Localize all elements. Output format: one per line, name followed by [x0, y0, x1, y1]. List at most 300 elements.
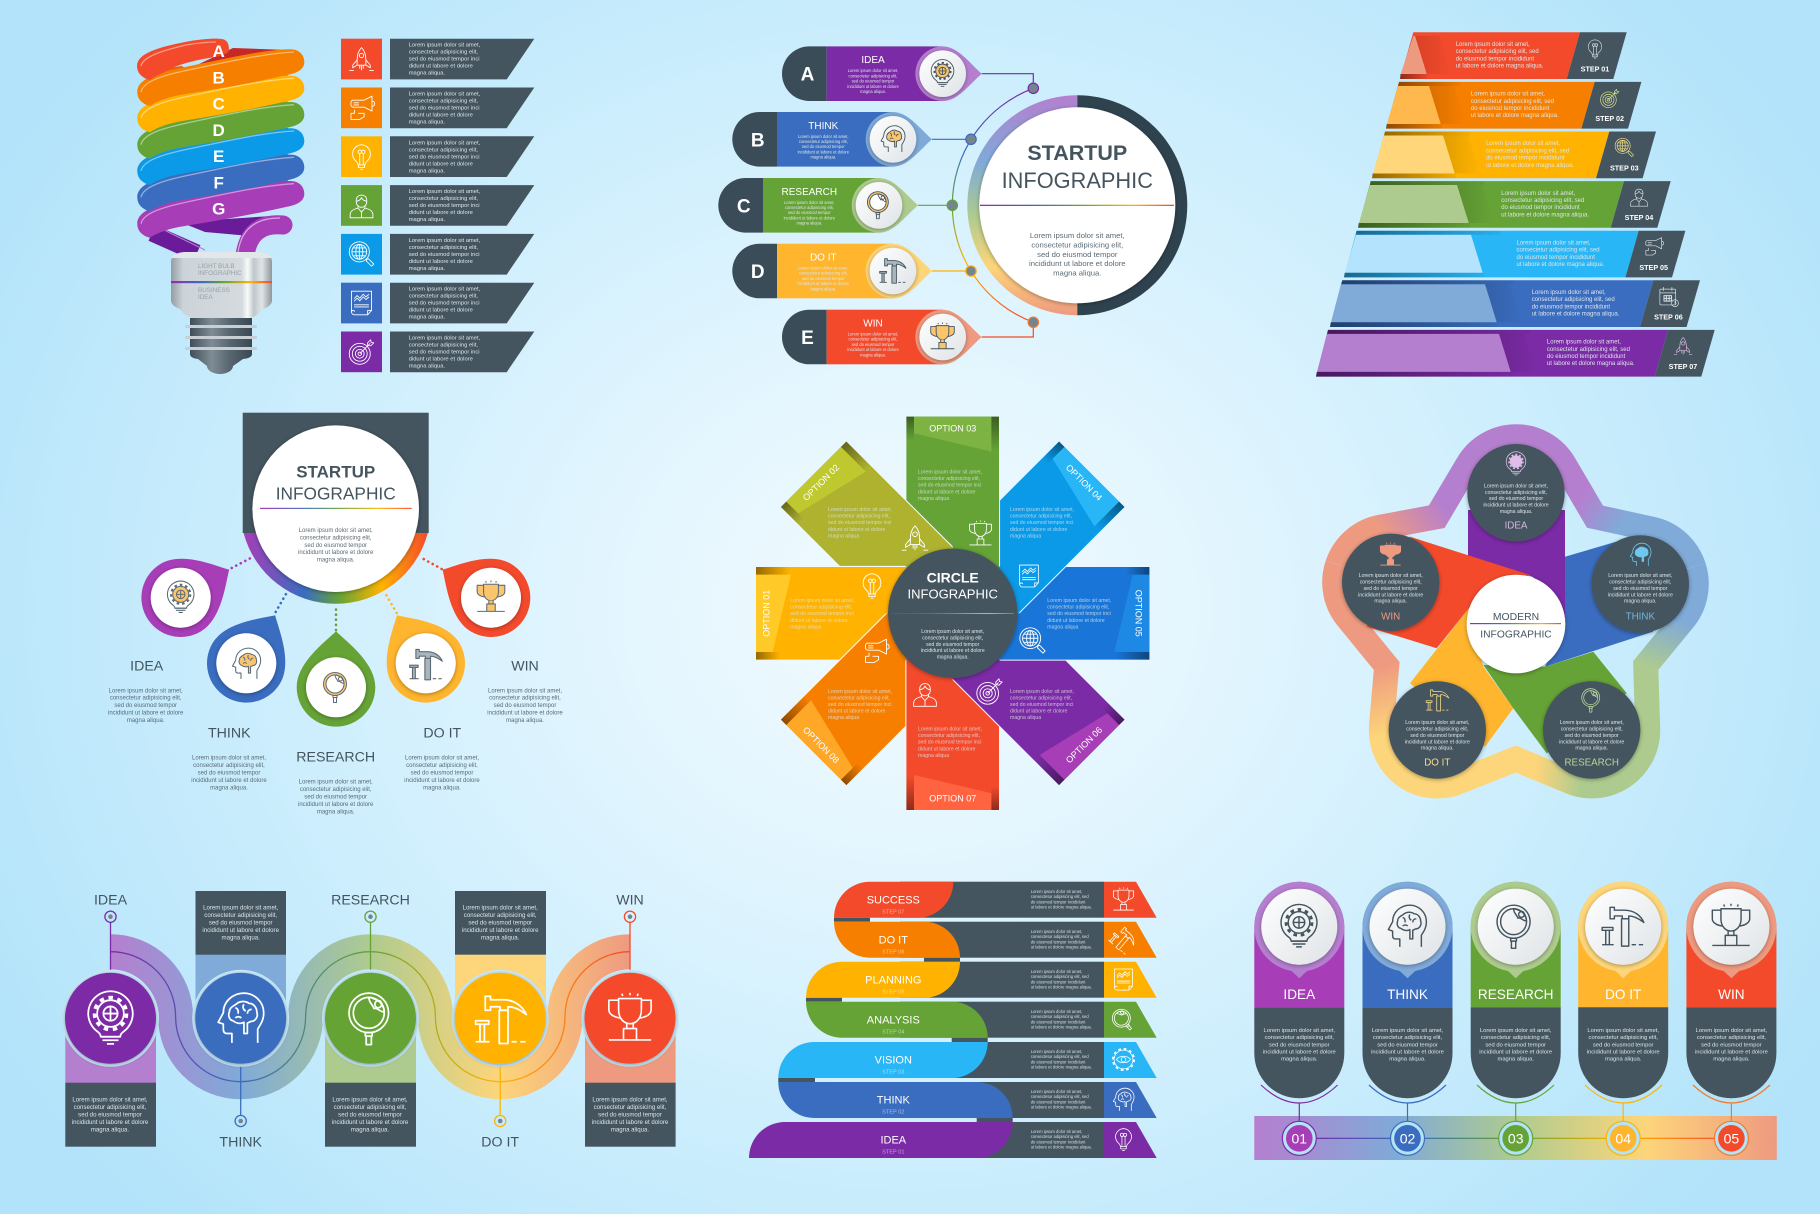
- step 01: ut labore et dolore magna aliqua.: [1456, 64, 1544, 70]
- circle IDEA: [62, 970, 159, 1067]
- ribbon think: ut labore et dolore magna aliqua.: [1031, 1105, 1092, 1110]
- step 02: do eiusmod tempor incididunt: [1471, 106, 1550, 112]
- label DO IT: sed do eiusmod tempor: [411, 770, 473, 776]
- star outline: [1335, 437, 1696, 786]
- box THINK text: [196, 891, 286, 955]
- panel: numbered columns: [1254, 882, 1777, 1160]
- header block and ring: magna aliqua.: [317, 558, 355, 564]
- petal texts: didunt ut labore et dolore: [828, 709, 886, 715]
- list row 4: didunt ut labore et dolore: [409, 210, 473, 216]
- step 03: consectetur adipisicing elit, sed: [1486, 148, 1569, 154]
- box IDEA text: magna aliqua.: [91, 1127, 129, 1134]
- petal texts: consectetur adipisicing elit,: [828, 514, 890, 520]
- pill D DO IT: Lorem ipsum dolor sit amet,: [798, 266, 849, 270]
- pill C RESEARCH: sed do eiusmod tempor: [788, 210, 831, 215]
- central circle: magna aliqua.: [1053, 269, 1101, 278]
- list row 5: Lorem ipsum dolor sit amet,: [409, 238, 481, 244]
- step 05: consectetur adipisicing elit, sed: [1516, 248, 1600, 254]
- petal option 01: [756, 567, 953, 660]
- list row 2: [341, 88, 534, 128]
- connector arc and lines: [918, 74, 1033, 337]
- step 03: [1372, 132, 1656, 178]
- header block and ring: sed do eiusmod tempor: [304, 543, 367, 549]
- box THINK text: incididunt ut labore et dolore: [202, 927, 280, 934]
- node THINK: THINK: [1626, 611, 1655, 622]
- node WIN: [1342, 534, 1439, 631]
- step 06: ut labore et dolore magna aliqua.: [1532, 312, 1620, 318]
- column IDEA: [1254, 882, 1344, 1155]
- step 02: Lorem ipsum dolor sit amet,: [1471, 92, 1545, 98]
- node RESEARCH: RESEARCH: [1564, 758, 1619, 769]
- node DO IT: magna aliqua.: [1421, 746, 1454, 752]
- box WIN text: Lorem ipsum dolor sit amet,: [592, 1096, 668, 1103]
- step 04: STEP 04: [1625, 213, 1653, 222]
- step 01: [1400, 32, 1627, 79]
- light bulb spiral: [137, 39, 304, 255]
- node WIN: sed do eiusmod tempor: [1364, 586, 1418, 592]
- step 05: STEP 05: [1639, 263, 1668, 272]
- column RESEARCH: 03: [1508, 1130, 1524, 1146]
- central circle: incididunt ut labore et dolore: [1029, 259, 1126, 268]
- step 02: STEP 02: [1595, 114, 1624, 123]
- label RESEARCH: [296, 750, 375, 815]
- box WIN text: magna aliqua.: [611, 1127, 649, 1134]
- circle RESEARCH: [322, 970, 419, 1067]
- list row 5: consectetur adipisicing elit,: [409, 245, 478, 251]
- list row 7: [341, 332, 534, 372]
- column THINK: [1362, 882, 1452, 1155]
- ribbon think: THINK: [877, 1094, 910, 1106]
- column THINK: Lorem ipsum dolor sit amet,: [1372, 1028, 1444, 1034]
- petal texts: Lorem ipsum dolor sit amet,: [790, 598, 854, 604]
- ribbon do it: DO IT: [879, 934, 908, 946]
- label THINK: [191, 726, 267, 791]
- box RESEARCH text: [325, 1083, 416, 1147]
- pill B THINK: incididunt ut labore et dolore: [798, 149, 850, 154]
- light bulb spiral: E: [213, 147, 224, 166]
- list row 4: consectetur adipisicing elit,: [409, 196, 478, 202]
- drop IDEA: [127, 536, 249, 651]
- column THINK: magna aliqua.: [1389, 1057, 1426, 1063]
- label THINK: Lorem ipsum dolor sit amet,: [192, 756, 266, 762]
- step 03: do eiusmod tempor incididunt: [1486, 156, 1565, 162]
- step 05: [1344, 231, 1685, 277]
- pill B THINK: B: [751, 130, 765, 151]
- central circle: consectetur adipisicing elit,: [1031, 240, 1123, 249]
- step 03: ut labore et dolore magna aliqua.: [1486, 163, 1574, 169]
- pill E WIN: Lorem ipsum dolor sit amet,: [848, 332, 898, 336]
- ribbon idea: Lorem ipsum dolor sit amet,: [1031, 1129, 1082, 1134]
- wave labels: DO IT: [481, 1135, 519, 1151]
- list row 4: Lorem ipsum dolor sit amet,: [409, 189, 481, 195]
- header block and ring: consectetur adipisicing elit,: [300, 535, 372, 541]
- petal option 05: [953, 567, 1149, 660]
- step 02: consectetur adipisicing elit, sed: [1471, 99, 1554, 105]
- label IDEA: [108, 659, 184, 724]
- light bulb spiral: A: [213, 42, 225, 61]
- list row 1: consectetur adipisicing elit,: [409, 50, 478, 56]
- column THINK: 02: [1400, 1130, 1415, 1146]
- label RESEARCH: incididunt ut labore et dolore: [298, 802, 374, 808]
- petal texts: sed do eiusmod tempor inci: [918, 483, 981, 489]
- list row 1: sed do eiusmod tempor inci: [409, 57, 480, 63]
- step 02: ut labore et dolore magna aliqua.: [1471, 113, 1559, 119]
- option labels: OPTION 05: [1133, 590, 1143, 637]
- step 03: STEP 03: [1610, 164, 1639, 173]
- box THINK text: Lorem ipsum dolor sit amet,: [203, 904, 279, 911]
- ribbon vision: do eiusmod tempor incididunt: [1031, 1059, 1086, 1064]
- list row 7: didunt ut labore et dolore: [409, 356, 473, 362]
- node THINK: magna aliqua.: [1624, 599, 1657, 605]
- pill C RESEARCH: incididunt ut labore et dolore: [784, 215, 836, 220]
- petal option 06: [920, 581, 1125, 785]
- ribbon analysis: [806, 1002, 1157, 1038]
- label IDEA: magna aliqua.: [127, 718, 165, 724]
- petal texts: didunt ut labore et dolore: [790, 618, 848, 624]
- ribbon planning: [806, 962, 1157, 998]
- petal texts: Lorem ipsum dolor sit amet,: [1010, 689, 1074, 695]
- label WIN: WIN: [511, 659, 539, 675]
- option labels: OPTION 01: [762, 590, 772, 637]
- petal texts: magna aliqua: [828, 715, 859, 721]
- drop WIN: [423, 536, 545, 651]
- label RESEARCH: RESEARCH: [296, 750, 375, 766]
- box RESEARCH text: magna aliqua.: [351, 1127, 389, 1134]
- list row 4: magna aliqua.: [409, 217, 446, 223]
- petal texts: sed do eiusmod tempor inci: [1047, 611, 1111, 617]
- pill B THINK: [732, 112, 932, 167]
- petal texts: sed do eiusmod tempor inci: [828, 520, 891, 526]
- petal texts: didunt ut labore et dolore: [1010, 527, 1068, 533]
- center circle: INFOGRAPHIC: [908, 586, 998, 601]
- node RESEARCH: Lorem ipsum dolor sit amet,: [1560, 720, 1624, 726]
- label RESEARCH: sed do eiusmod tempor: [304, 794, 367, 800]
- column RESEARCH: consectetur adipisicing elit,: [1481, 1035, 1551, 1041]
- circle DO IT: [452, 970, 549, 1067]
- step 07: do eiusmod tempor incididunt: [1547, 354, 1626, 360]
- label THINK: magna aliqua.: [210, 785, 248, 791]
- step 07: Lorem ipsum dolor sit amet,: [1547, 340, 1621, 346]
- column WIN: Lorem ipsum dolor sit amet,: [1696, 1028, 1768, 1034]
- petal texts: consectetur adipisicing elit,: [918, 733, 980, 739]
- ribbon idea: ut labore et dolore magna aliqua.: [1031, 1145, 1092, 1150]
- ribbon analysis: Lorem ipsum dolor sit amet,: [1031, 1009, 1082, 1014]
- node THINK: sed do eiusmod tempor: [1613, 586, 1668, 592]
- light bulb spiral: D: [213, 121, 225, 140]
- column THINK: consectetur adipisicing elit,: [1373, 1035, 1443, 1041]
- petal texts: consectetur adipisicing elit,: [1047, 605, 1109, 611]
- column WIN: consectetur adipisicing elit,: [1697, 1035, 1766, 1041]
- node WIN: magna aliqua.: [1374, 599, 1407, 605]
- list row 1: magna aliqua.: [409, 71, 446, 77]
- column WIN: sed do eiusmod tempor: [1701, 1042, 1762, 1048]
- step 04: consectetur adipisicing elit, sed: [1501, 198, 1584, 204]
- step 07: ut labore et dolore magna aliqua.: [1547, 361, 1635, 367]
- column DO IT: consectetur adipisicing elit,: [1589, 1035, 1658, 1041]
- ribbon think: [778, 1082, 1157, 1118]
- node IDEA: IDEA: [1505, 520, 1528, 531]
- pill E WIN: incididunt ut labore et dolore: [847, 347, 899, 352]
- list row 1: [341, 39, 534, 79]
- node IDEA: sed do eiusmod tempor: [1489, 496, 1543, 502]
- step 04: do eiusmod tempor incididunt: [1501, 205, 1580, 211]
- pill A IDEA: [782, 46, 982, 101]
- ribbon think: Lorem ipsum dolor sit amet,: [1031, 1089, 1082, 1094]
- petal option 04: [920, 441, 1125, 646]
- list row 1: Lorem ipsum dolor sit amet,: [409, 43, 481, 49]
- petal texts: consectetur adipisicing elit,: [828, 695, 890, 701]
- central circle: Lorem ipsum dolor sit amet,: [1030, 231, 1125, 240]
- column DO IT: magna aliqua.: [1605, 1057, 1642, 1063]
- center circle: INFOGRAPHIC: [1480, 629, 1552, 640]
- panel: light bulb infographic: [137, 39, 534, 374]
- petal icons: [863, 520, 1045, 706]
- ribbon planning: PLANNING: [865, 974, 921, 986]
- step 04: ut labore et dolore magna aliqua.: [1501, 212, 1589, 218]
- circle WIN: [582, 970, 678, 1067]
- ribbon success: Lorem ipsum dolor sit amet,: [1031, 889, 1082, 894]
- central circle: STARTUP: [1027, 141, 1127, 165]
- pill E WIN: [782, 310, 982, 364]
- pill A IDEA: Lorem ipsum dolor sit amet,: [848, 68, 898, 73]
- step 04: [1358, 181, 1671, 228]
- pill C RESEARCH: RESEARCH: [782, 187, 837, 198]
- box WIN text: [585, 1083, 676, 1147]
- box IDEA text: Lorem ipsum dolor sit amet,: [72, 1096, 148, 1103]
- dotted connectors: [232, 558, 442, 630]
- petal option 03: [906, 417, 999, 613]
- column DO IT: incididunt ut labore et dolore: [1587, 1049, 1660, 1055]
- petal texts: Lorem ipsum dolor sit amet,: [828, 507, 892, 513]
- node IDEA: Lorem ipsum dolor sit amet,: [1484, 484, 1548, 490]
- pill C RESEARCH: magna aliqua.: [796, 221, 822, 226]
- column RESEARCH: [1471, 882, 1561, 1155]
- ribbon do it: STEP 06: [882, 950, 904, 956]
- ribbon do it: [834, 922, 1157, 958]
- pill C RESEARCH: Lorem ipsum dolor sit amet,: [784, 200, 835, 205]
- petal texts: didunt ut labore et dolore: [1010, 709, 1068, 715]
- option labels: OPTION 08: [801, 725, 841, 765]
- pill E WIN: consectetur adipisicing elit,: [849, 337, 897, 342]
- header block and ring: [243, 413, 429, 604]
- ribbon vision: STEP 03: [882, 1070, 904, 1076]
- step 01: STEP 01: [1581, 64, 1609, 74]
- header block and ring: incididunt ut labore et dolore: [298, 550, 374, 556]
- circle THINK: [192, 970, 289, 1067]
- column IDEA: magna aliqua.: [1281, 1057, 1318, 1063]
- list row 3: consectetur adipisicing elit,: [409, 147, 478, 153]
- ribbon planning: Lorem ipsum dolor sit amet,: [1031, 969, 1082, 974]
- petal texts: magna aliqua: [790, 624, 822, 630]
- pill D DO IT: sed do eiusmod tempor: [802, 276, 845, 281]
- center circle: CIRCLE: [927, 569, 979, 585]
- petal option 07: [906, 613, 999, 810]
- box THINK text: sed do eiusmod tempor: [209, 920, 273, 926]
- center circle: incididunt ut labore et dolore: [921, 648, 985, 654]
- box DO IT text: magna aliqua.: [481, 935, 520, 942]
- pill E WIN: magna aliqua.: [860, 352, 886, 357]
- ribbon success: consectetur adipisicing elit, sed: [1031, 894, 1089, 899]
- node RESEARCH: [1543, 681, 1640, 779]
- column RESEARCH: Lorem ipsum dolor sit amet,: [1480, 1028, 1552, 1034]
- petal texts: consectetur adipisicing elit,: [1010, 514, 1072, 520]
- panel: step pyramid: [1316, 32, 1715, 377]
- node THINK: incididunt ut labore et dolore: [1608, 592, 1673, 598]
- ribbon analysis: consectetur adipisicing elit, sed: [1031, 1014, 1089, 1019]
- column DO IT: DO IT: [1605, 987, 1641, 1002]
- label DO IT: incididunt ut labore et dolore: [404, 778, 480, 784]
- ribbon do it: consectetur adipisicing elit, sed: [1031, 934, 1089, 939]
- ribbon success: [834, 882, 1157, 918]
- column DO IT: Lorem ipsum dolor sit amet,: [1587, 1028, 1659, 1034]
- list row 6: Lorem ipsum dolor sit amet,: [409, 287, 481, 293]
- list row 5: magna aliqua.: [409, 266, 446, 272]
- label RESEARCH: magna aliqua.: [317, 809, 355, 815]
- petal texts: sed do eiusmod tempor inci: [918, 740, 981, 746]
- column THINK: sed do eiusmod tempor: [1377, 1042, 1438, 1048]
- node DO IT: incididunt ut labore et dolore: [1405, 739, 1470, 745]
- petal texts: magna aliqua: [1047, 624, 1079, 630]
- box IDEA text: consectetur adipisicing elit,: [74, 1104, 147, 1111]
- petal texts: magna aliqua: [918, 496, 949, 502]
- petal texts: sed do eiusmod tempor inci: [790, 611, 854, 617]
- node DO IT: consectetur adipisicing elit,: [1406, 727, 1468, 733]
- list row 7: sed do eiusmod tempor inci: [409, 350, 480, 356]
- node DO IT: sed do eiusmod tempor: [1410, 733, 1465, 739]
- panel: modern star infographic: [1335, 437, 1696, 786]
- ribbon do it: Lorem ipsum dolor sit amet,: [1031, 929, 1082, 934]
- node WIN: Lorem ipsum dolor sit amet,: [1359, 573, 1423, 579]
- petal texts: magna aliqua: [1010, 533, 1041, 539]
- node THINK: Lorem ipsum dolor sit amet,: [1608, 573, 1672, 579]
- label DO IT: magna aliqua.: [423, 785, 461, 791]
- list row 7: magna aliqua.: [409, 364, 446, 370]
- panel: wave timeline: [62, 891, 678, 1151]
- connector lines and nodes: [105, 911, 636, 1127]
- step 07: consectetur adipisicing elit, sed: [1547, 347, 1630, 353]
- pill B THINK: consectetur adipisicing elit,: [799, 139, 848, 144]
- central circle: INFOGRAPHIC: [1002, 168, 1153, 193]
- dark bars: [778, 882, 1104, 1158]
- ribbon vision: [778, 1042, 1157, 1078]
- pill D DO IT: consectetur adipisicing elit,: [799, 271, 848, 276]
- list row 6: consectetur adipisicing elit,: [409, 294, 478, 300]
- pill E WIN: WIN: [863, 318, 883, 330]
- pill A IDEA: consectetur adipisicing elit,: [849, 73, 897, 78]
- center circle: Lorem ipsum dolor sit amet,: [921, 629, 984, 635]
- center circle: sed do eiusmod tempor: [926, 642, 980, 648]
- column WIN: [1686, 882, 1776, 1155]
- list row 5: [341, 234, 534, 275]
- label IDEA: sed do eiusmod tempor: [114, 703, 177, 709]
- node IDEA: [1467, 444, 1565, 541]
- panel: circle infographic: [756, 417, 1149, 810]
- column DO IT: sed do eiusmod tempor: [1593, 1042, 1654, 1048]
- label IDEA: IDEA: [130, 659, 164, 675]
- panel: startup infographic with pills: [718, 46, 1187, 364]
- light bulb base: IDEA: [198, 294, 213, 301]
- step 05: ut labore et dolore magna aliqua.: [1516, 262, 1605, 268]
- column IDEA: 01: [1292, 1130, 1307, 1146]
- list row 3: magna aliqua.: [409, 168, 446, 174]
- light bulb base: BUSINESS: [198, 287, 230, 294]
- pill D DO IT: magna aliqua.: [810, 286, 836, 291]
- ribbon analysis: ut labore et dolore magna aliqua.: [1031, 1025, 1092, 1030]
- ribbon think: do eiusmod tempor incididunt: [1031, 1099, 1086, 1104]
- step 04: Lorem ipsum dolor sit amet,: [1501, 191, 1576, 197]
- step 05: do eiusmod tempor incididunt: [1516, 255, 1595, 261]
- ribbon do it: ut labore et dolore magna aliqua.: [1031, 945, 1092, 950]
- column WIN: WIN: [1718, 987, 1745, 1002]
- column WIN: 05: [1724, 1130, 1739, 1146]
- ribbon planning: STEP 05: [882, 990, 904, 996]
- panel: startup drops: [108, 413, 563, 815]
- center circle: [888, 549, 1017, 678]
- list row 6: magna aliqua.: [409, 315, 446, 321]
- star arms: [1367, 510, 1653, 753]
- list row 3: Lorem ipsum dolor sit amet,: [409, 140, 481, 146]
- ribbon success: SUCCESS: [867, 894, 920, 906]
- petal texts: Lorem ipsum dolor sit amet,: [1047, 598, 1111, 604]
- list row 2: sed do eiusmod tempor inci: [409, 106, 480, 112]
- box THINK text: magna aliqua.: [222, 935, 260, 942]
- option labels: [762, 423, 1143, 804]
- box IDEA text: sed do eiusmod tempor: [78, 1112, 142, 1118]
- wave labels: WIN: [616, 892, 644, 908]
- pill A IDEA: incididunt ut labore et dolore: [847, 84, 899, 89]
- central circle: sed do eiusmod tempor: [1037, 250, 1118, 259]
- ribbon success: ut labore et dolore magna aliqua.: [1031, 905, 1092, 910]
- label RESEARCH: Lorem ipsum dolor sit amet,: [299, 780, 373, 786]
- column THINK: incididunt ut labore et dolore: [1371, 1049, 1444, 1055]
- pill D DO IT: incididunt ut labore et dolore: [798, 281, 850, 286]
- petal texts: sed do eiusmod tempor inci: [828, 702, 891, 708]
- label DO IT: Lorem ipsum dolor sit amet,: [405, 756, 479, 762]
- step 02: [1386, 82, 1641, 129]
- pill B THINK: THINK: [808, 121, 839, 132]
- option labels: OPTION 02: [801, 462, 841, 503]
- petal texts: Lorem ipsum dolor sit amet,: [828, 689, 892, 695]
- box RESEARCH text: consectetur adipisicing elit,: [334, 1104, 407, 1111]
- wave labels: THINK: [219, 1135, 263, 1151]
- ribbon planning: ut labore et dolore magna aliqua.: [1031, 985, 1092, 990]
- column IDEA: IDEA: [1283, 987, 1316, 1002]
- label THINK: incididunt ut labore et dolore: [191, 778, 267, 784]
- petal texts: didunt ut labore et dolore: [918, 489, 976, 495]
- header block and ring: INFOGRAPHIC: [276, 483, 396, 503]
- label IDEA: incididunt ut labore et dolore: [108, 710, 184, 716]
- center circle: [1467, 575, 1565, 673]
- pill D DO IT: D: [751, 262, 765, 283]
- step 07: STEP 07: [1669, 362, 1697, 371]
- wave labels: RESEARCH: [331, 892, 410, 908]
- step 01: Lorem ipsum dolor sit amet,: [1456, 42, 1530, 48]
- petal texts: didunt ut labore et dolore: [918, 746, 976, 752]
- option labels: OPTION 04: [1064, 462, 1104, 503]
- list row 6: [341, 283, 534, 323]
- option labels: OPTION 06: [1064, 725, 1104, 765]
- petal texts: magna aliqua: [918, 753, 949, 759]
- node THINK: [1592, 535, 1689, 633]
- drop THINK: [192, 595, 309, 717]
- list row 5: sed do eiusmod tempor inci: [409, 252, 480, 258]
- pill A IDEA: A: [801, 65, 815, 86]
- box DO IT text: consectetur adipisicing elit,: [464, 912, 537, 919]
- petal texts: Lorem ipsum dolor sit amet,: [1010, 507, 1074, 513]
- petal texts: didunt ut labore et dolore: [1047, 618, 1105, 624]
- list row 7: Lorem ipsum dolor sit amet,: [409, 336, 481, 342]
- light bulb spiral: B: [213, 68, 225, 88]
